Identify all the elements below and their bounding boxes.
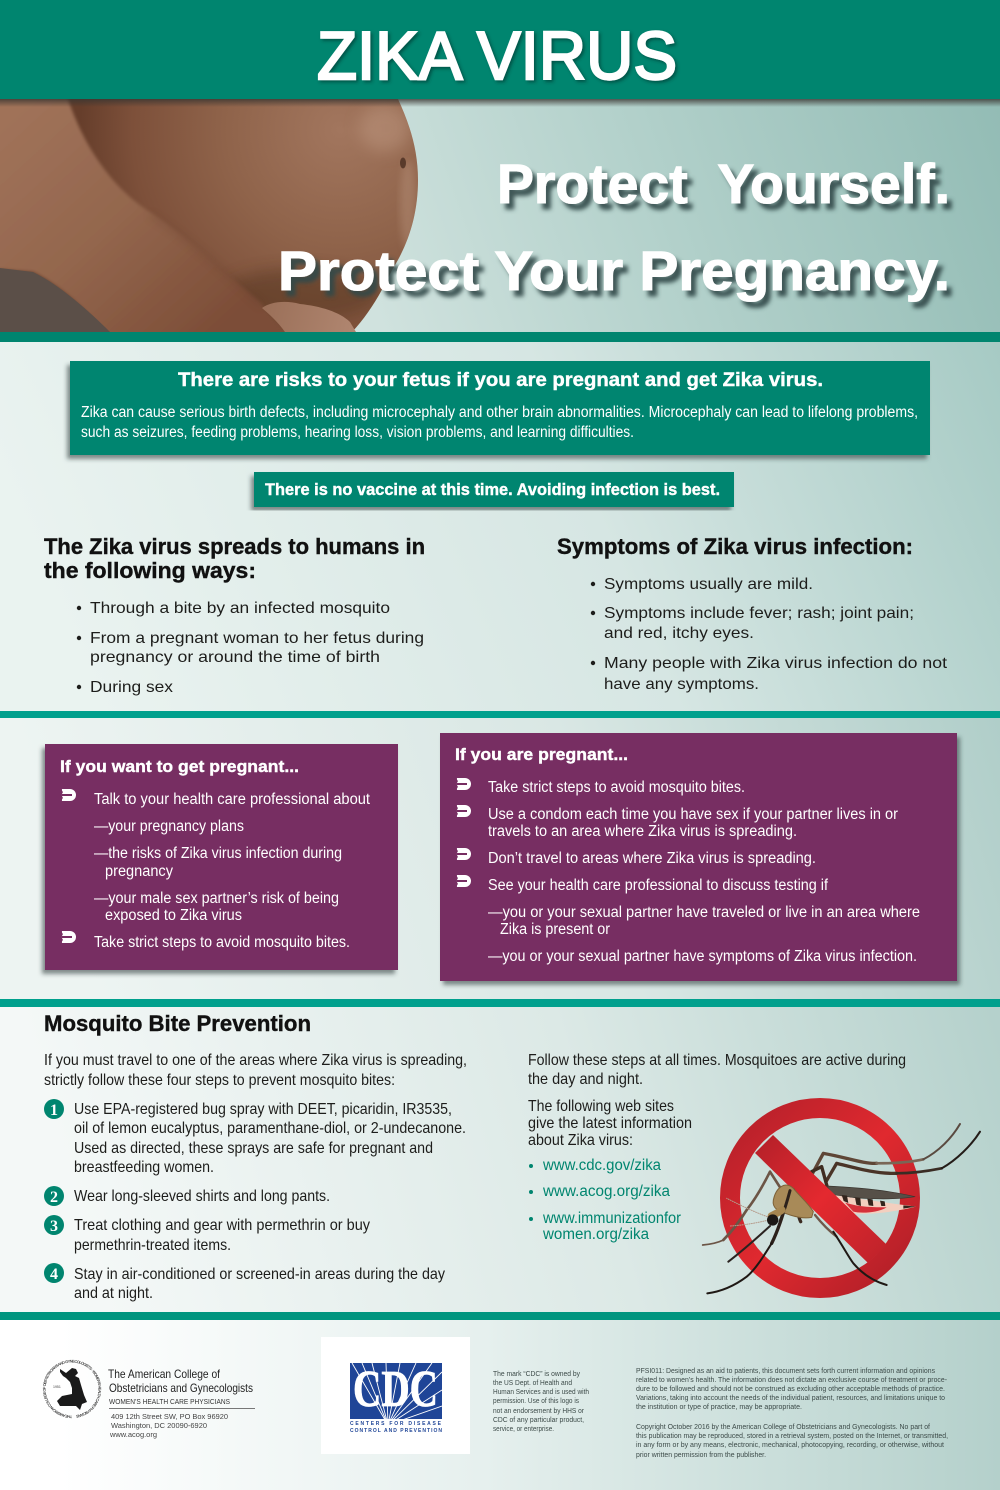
hero band bottom (0, 332, 1000, 342)
logo: ACOG: 409 12th Street SW, PO Box 96920 (111, 1412, 228, 1421)
text block: how Zika spreads: The Zika virus spreads to humans in (44, 534, 425, 559)
panel: if you are pregnant: Don’t travel to areas where Zika virus is spreading. (488, 850, 816, 867)
tagline (278, 152, 950, 302)
icon: no mosquito sign (703, 1108, 980, 1293)
logo: ACOG: THE AMERICAN COLLEGE OF OBSTETRICIANS AND GYNECOLOGISTS · WOMEN’S HEALTH CARE PHYSICIANS (42, 1360, 102, 1418)
text block: four steps: breastfeeding women. (74, 1159, 214, 1176)
panel: if you want to get pregnant: exposed to Zika virus (105, 907, 242, 924)
text block: symptoms: Symptoms usually are mild. (604, 576, 813, 593)
text block: four steps: and at night. (74, 1285, 153, 1302)
panel: if you want to get pregnant: pregnancy (105, 863, 173, 880)
text block: four steps: oil of lemon eucalyptus, paramenthane-diol, or 2-undecanone. (74, 1120, 466, 1137)
text block: four steps: Wear long-sleeved shirts and long pants. (74, 1188, 330, 1205)
text block: CDC mark notice: the US Dept. of Health and (493, 1380, 572, 1387)
text block: follow these steps and web sites: the day and night. (528, 1071, 643, 1088)
panel: if you are pregnant: Zika is present or (500, 921, 610, 938)
text block: CDC mark notice: The mark “CDC” is owned by (493, 1371, 580, 1378)
logo: ACOG: Washington, DC 20090-6920 (111, 1421, 207, 1430)
text block: four steps: Used as directed, these sprays are safe for pregnant and (74, 1140, 433, 1157)
text block: four steps (44, 1052, 467, 1302)
text block: how Zika spreads (44, 534, 425, 696)
panel: if you are pregnant: Take strict steps to avoid mosquito bites. (488, 779, 745, 796)
text block: four steps: Treat clothing and gear with permethrin or buy (74, 1217, 370, 1234)
text block: disclaimer and copyright: PFSI011: Designed as an aid to patients, this document sets forth current information and opinions (636, 1368, 935, 1375)
text block: CDC mark notice (493, 1371, 589, 1433)
text block: CDC mark notice: not an endorsement by HHS or (493, 1408, 585, 1415)
tagline: Protect Your Pregnancy. (278, 239, 950, 302)
text block: symptoms: Symptoms of Zika virus infection: (557, 534, 913, 559)
text block: symptoms: have any symptoms. (604, 676, 759, 693)
text block: disclaimer and copyright: in any form or by any means, electronic, mechanical, photocopying, recording, or otherwise, without (636, 1442, 944, 1449)
panel: if you want to get pregnant: —the risks of Zika virus infection during (94, 845, 342, 862)
title: ZIKA VIRUS (317, 18, 677, 94)
text block: follow these steps and web sites: The following web sites (528, 1098, 674, 1115)
text block: CDC mark notice: Human Services and is used with (493, 1389, 589, 1396)
text block: symptoms: Many people with Zika virus infection do not (604, 655, 948, 672)
text block: disclaimer and copyright: the institution or type of practice, may be appropriate. (636, 1404, 802, 1411)
text block: follow these steps and web sites (528, 1052, 906, 1243)
logo: ACOG (42, 1360, 255, 1439)
text block: disclaimer and copyright: related to women’s health. The information does not dictate an exclusive course of treatment or proce- (636, 1377, 948, 1384)
text block: four steps: If you must travel to one of the areas where Zika virus is spreading, (44, 1052, 467, 1069)
panel: if you want to get pregnant (45, 744, 398, 970)
text block: how Zika spreads: Through a bite by an infected mosquito (90, 600, 390, 617)
text block: CDC mark notice: permission. Use of this logo is (493, 1398, 579, 1405)
callout: no vaccine (254, 472, 734, 507)
text block: four steps: 1 (50, 1102, 58, 1119)
panel: fetus risks: Zika can cause serious birth defects, including microcephaly and other brain abnormalities. Microcephaly can lead to lifelong problems, (81, 404, 918, 421)
hero photo: pregnant belly with tagline background (0, 99, 1000, 332)
logo: CDC (321, 1337, 470, 1454)
logo: CDC: CONTROL AND PREVENTION (350, 1428, 442, 1434)
text block: follow these steps and web sites: www.acog.org/zika (542, 1183, 670, 1200)
text block: disclaimer and copyright: this publication may be reproduced, stored in a retrieval system, posted on the Internet, or transmitted, (636, 1433, 948, 1440)
text block: disclaimer and copyright: Variations, taking into account the needs of the individual patient, resources, and limitations unique to (636, 1395, 945, 1402)
callout: no vaccine: There is no vaccine at this time. Avoiding infection is best. (265, 481, 720, 499)
panel: fetus risks: There are risks to your fetus if you are pregnant and get Zika virus. (178, 370, 823, 391)
text block: follow these steps and web sites: www.immunizationfor (542, 1210, 681, 1227)
panel: if you want to get pregnant: If you want to get pregnant... (60, 757, 299, 776)
logo: ACOG: Obstetricians and Gynecologists (109, 1381, 253, 1395)
logo: ACOG: The American College of (108, 1367, 221, 1381)
logo: ACOG: www.acog.org (109, 1430, 157, 1439)
header band (0, 0, 1000, 99)
text block: four steps: 2 (50, 1189, 58, 1206)
panel: if you want to get pregnant: Talk to your health care professional about (94, 791, 371, 808)
text block: follow these steps and web sites: about Zika virus: (528, 1132, 633, 1149)
text block: how Zika spreads: From a pregnant woman to her fetus during (90, 630, 424, 647)
text block: CDC mark notice: service, or enterprise. (493, 1426, 554, 1433)
text block: disclaimer and copyright: prior written permission from the publisher. (636, 1452, 766, 1459)
panel: if you are pregnant: If you are pregnant... (455, 745, 628, 764)
panel: if you are pregnant: —you or your sexual partner have symptoms of Zika virus infection. (488, 948, 917, 965)
section backgrounds (0, 342, 1000, 1490)
panel: if you are pregnant: Use a condom each time you have sex if your partner lives in or (488, 806, 898, 823)
panel: if you want to get pregnant: Take strict steps to avoid mosquito bites. (94, 934, 350, 951)
text block: four steps: Stay in air-conditioned or screened-in areas during the day (74, 1266, 445, 1283)
text block: four steps: Use EPA-registered bug spray with DEET, picaridin, IR3535, (74, 1101, 452, 1118)
logo: CDC: CDC (353, 1361, 438, 1418)
text block: disclaimer and copyright (636, 1368, 948, 1459)
logo: ACOG: WOMEN’S HEALTH CARE PHYSICIANS (109, 1397, 230, 1406)
text block: disclaimer and copyright: Copyright October 2016 by the American College of Obstetricians and Gynecologists. No part of (636, 1424, 930, 1431)
text block: CDC mark notice: CDC of any particular product, (493, 1417, 584, 1424)
text block: follow these steps and web sites: women.org/zika (542, 1226, 649, 1243)
text block: four steps: permethrin-treated items. (74, 1237, 231, 1254)
text block: symptoms: Symptoms include fever; rash; joint pain; (604, 605, 914, 622)
text block: disclaimer and copyright: dure to be followed and should not be construed as excluding other acceptable methods of practice. (636, 1386, 945, 1393)
text block: symptoms (557, 534, 948, 693)
panel: if you want to get pregnant: —your male sex partner’s risk of being (94, 890, 339, 907)
logo: CDC: CENTERS FOR DISEASE (350, 1421, 442, 1427)
panel: if you are pregnant: travels to an area where Zika virus is spreading. (488, 823, 797, 840)
panel: fetus risks: such as seizures, feeding problems, hearing loss, vision problems, and learning difficulties. (81, 424, 634, 441)
heading: mosquito bite prevention: Mosquito Bite Prevention (44, 1011, 311, 1036)
panel: if you are pregnant: —you or your sexual partner have traveled or live in an area where (488, 904, 920, 921)
text block: four steps: 4 (50, 1266, 58, 1283)
panel: fetus risks (70, 361, 930, 455)
text block: how Zika spreads: pregnancy or around the time of birth (90, 649, 380, 666)
text block: four steps: 3 (50, 1218, 58, 1235)
panel: if you are pregnant (440, 733, 957, 981)
text block: four steps: strictly follow these four steps to prevent mosquito bites: (44, 1072, 395, 1089)
panel: if you are pregnant: See your health care professional to discuss testing if (488, 877, 829, 894)
text block: how Zika spreads: the following ways: (44, 558, 256, 583)
text block: how Zika spreads: During sex (90, 679, 173, 696)
text block: follow these steps and web sites: www.cdc.gov/zika (542, 1157, 661, 1174)
logo: ACOG: 1951 (53, 1385, 61, 1389)
text block: follow these steps and web sites: give the latest information (528, 1115, 692, 1132)
text block: symptoms: and red, itchy eyes. (604, 625, 754, 642)
panel: if you want to get pregnant: —your pregnancy plans (94, 818, 244, 835)
text block: follow these steps and web sites: Follow these steps at all times. Mosquitoes are active during (528, 1052, 906, 1069)
tagline: Protect Yourself. (497, 152, 950, 215)
